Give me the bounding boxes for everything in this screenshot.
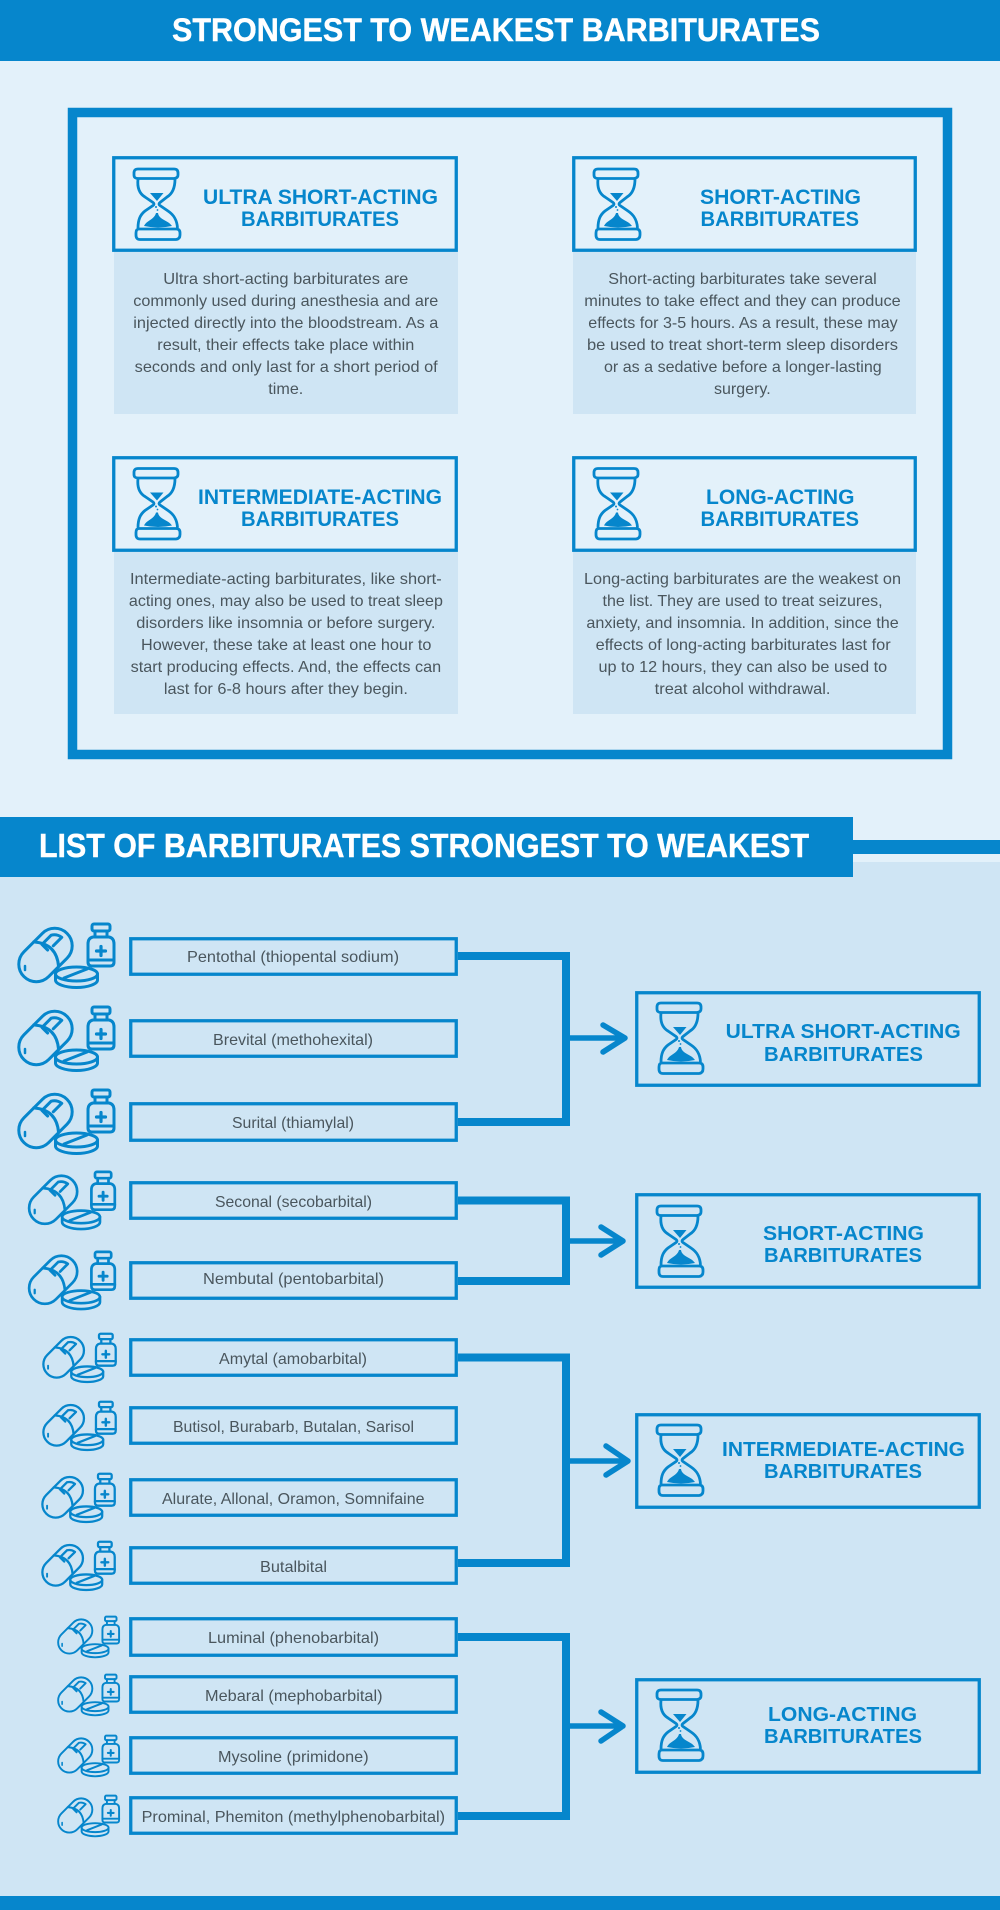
icon: pills <box>38 1332 116 1383</box>
card description: commonly used during anesthesia and are <box>133 293 438 310</box>
card heading: LONG-ACTING <box>706 486 854 509</box>
class box: SHORT-ACTING <box>763 1223 924 1245</box>
icon: pills <box>12 1087 114 1155</box>
panel: short-acting card <box>573 158 916 414</box>
drug label: Butisol, Burabarb, Butalan, Sarisol <box>173 1419 414 1436</box>
drug label <box>131 1183 456 1218</box>
icon: hourglass <box>657 1690 703 1760</box>
card description: start producing effects. And, the effects can <box>131 659 441 676</box>
panel: ultra short-acting card <box>114 158 458 414</box>
icon: hourglass <box>134 169 180 240</box>
group: intermediate-acting drugs <box>37 1332 979 1591</box>
card description: treat alcohol withdrawal. <box>655 681 830 698</box>
drug label: Alurate, Allonal, Oramon, Somnifaine <box>162 1491 425 1508</box>
card description <box>584 271 901 398</box>
card description: acting ones, may also be used to treat sleep <box>129 593 443 610</box>
class box: ULTRA SHORT-ACTING <box>726 1021 961 1043</box>
drug label: Mysoline (primidone) <box>218 1749 369 1766</box>
card header box <box>114 158 456 250</box>
drug label <box>131 1677 456 1712</box>
drug label: Brevital (methohexital) <box>213 1032 373 1049</box>
icon: hourglass <box>594 468 640 539</box>
icon: hourglass <box>657 1425 703 1496</box>
card heading <box>700 186 861 231</box>
card heading: SHORT-ACTING <box>700 186 861 209</box>
card description: anxiety, and insomnia. In addition, since the <box>586 615 899 632</box>
class box: BARBITURATES <box>764 1245 922 1267</box>
drug label: Nembutal (pentobarbital) <box>203 1271 384 1288</box>
panel: long-acting card <box>573 458 916 714</box>
drug label <box>131 1408 456 1443</box>
card description: Short-acting barbiturates take several <box>608 271 877 288</box>
icon: pills <box>12 1004 114 1072</box>
class box: LONG-ACTING <box>768 1704 917 1726</box>
card heading <box>203 186 438 231</box>
card header box <box>574 458 915 550</box>
section heading: LIST OF BARBITURATES STRONGEST TO WEAKEST <box>39 827 809 864</box>
card description <box>584 571 901 698</box>
card description: last for 6-8 hours after they begin. <box>164 681 408 698</box>
class box <box>637 1415 979 1507</box>
drug label <box>131 1340 456 1375</box>
class box: INTERMEDIATE-ACTING <box>722 1439 965 1461</box>
arrow <box>568 1446 628 1475</box>
section heading banner <box>0 817 1000 877</box>
group: ultra short-acting drugs <box>12 921 979 1155</box>
icon: hourglass <box>134 468 180 539</box>
icon: hourglass <box>594 169 640 240</box>
class box: BARBITURATES <box>764 1461 922 1483</box>
group: long-acting drugs <box>54 1615 979 1837</box>
icon: pills <box>37 1540 115 1591</box>
card body background <box>573 252 916 414</box>
drug label: Luminal (phenobarbital) <box>208 1630 379 1647</box>
card description: result, their effects take place within <box>157 337 414 354</box>
drug label <box>131 1798 456 1833</box>
class box: BARBITURATES <box>764 1044 923 1066</box>
icon: pills <box>54 1673 119 1716</box>
icon: pills <box>37 1472 115 1523</box>
class box <box>637 1680 979 1772</box>
card description: However, these take at least one hour to <box>141 637 431 654</box>
arrow <box>568 1025 625 1052</box>
card description: time. <box>268 381 303 398</box>
drug label <box>131 1548 456 1583</box>
drug label <box>131 939 456 974</box>
title banner <box>0 0 1000 61</box>
drug label <box>131 1104 456 1140</box>
card description: effects of long-acting barbiturates last for <box>596 637 891 654</box>
drug label: Mebaral (mephobarbital) <box>205 1688 382 1705</box>
card heading: BARBITURATES <box>700 208 859 231</box>
card body background <box>114 252 458 414</box>
connector bracket <box>458 956 566 1122</box>
card body background <box>573 552 916 714</box>
class box <box>637 1195 979 1287</box>
icon: pills <box>54 1615 119 1658</box>
panel: list section background <box>0 862 1000 1896</box>
group: short-acting drugs <box>23 1169 979 1310</box>
icon: pills <box>12 921 114 989</box>
card description: up to 12 hours, they can also be used to <box>598 659 887 676</box>
icon: pills <box>54 1794 119 1837</box>
drug label: Seconal (secobarbital) <box>215 1194 372 1211</box>
drug label: Surital (thiamylal) <box>232 1115 354 1132</box>
panel: intermediate-acting card <box>114 458 458 714</box>
card heading: BARBITURATES <box>241 508 399 531</box>
card description: be used to treat short-term sleep disorders <box>587 337 898 354</box>
card heading: INTERMEDIATE-ACTING <box>198 486 442 509</box>
connector bracket <box>458 1200 566 1281</box>
footer bar <box>0 1896 1000 1910</box>
icon: pills <box>54 1734 119 1777</box>
drug label: Amytal (amobarbital) <box>219 1351 367 1368</box>
drug label <box>131 1021 456 1056</box>
card heading: ULTRA SHORT-ACTING <box>203 186 438 209</box>
card heading <box>198 486 442 531</box>
card header box <box>574 158 915 250</box>
drug label <box>131 1619 456 1655</box>
card header box <box>114 458 456 550</box>
panel: barbiturate classes frame <box>72 112 948 754</box>
icon: hourglass <box>657 1003 703 1074</box>
icon: pills <box>23 1249 115 1310</box>
connector bracket <box>458 1358 566 1563</box>
card description: Intermediate-acting barbiturates, like short- <box>130 571 442 588</box>
drug label: Butalbital <box>260 1559 327 1576</box>
card heading: BARBITURATES <box>241 208 399 231</box>
card description <box>133 271 438 398</box>
card description: Ultra short-acting barbiturates are <box>163 271 408 288</box>
drug label <box>131 1480 456 1515</box>
card description: injected directly into the bloodstream. As a <box>133 315 438 332</box>
card description: minutes to take effect and they can produce <box>584 293 901 310</box>
drug label: Prominal, Phemiton (methylphenobarbital) <box>142 1809 445 1826</box>
class box: BARBITURATES <box>764 1726 922 1748</box>
card description: the list. They are used to treat seizures, <box>602 593 883 610</box>
drug label <box>131 1738 456 1773</box>
card description: seconds and only last for a short period of <box>135 359 438 376</box>
arrow <box>568 1227 623 1255</box>
card body background <box>114 552 458 714</box>
card description: or as a sedative before a longer-lasting <box>604 359 882 376</box>
drug label: Pentothal (thiopental sodium) <box>187 949 399 966</box>
icon: pills <box>23 1169 115 1230</box>
card description <box>129 571 443 698</box>
card description: disorders like insomnia or before surgery. <box>136 615 435 632</box>
class box <box>637 993 979 1085</box>
card description: surgery. <box>714 381 771 398</box>
arrow <box>568 1712 623 1741</box>
card description: effects for 3-5 hours. As a result, these may <box>588 315 898 332</box>
card description: Long-acting barbiturates are the weakest on <box>584 571 901 588</box>
card heading <box>700 486 859 531</box>
drug label <box>131 1263 456 1298</box>
card heading: BARBITURATES <box>700 508 859 531</box>
icon: hourglass <box>657 1206 703 1276</box>
icon: pills <box>38 1400 116 1451</box>
title: STRONGEST TO WEAKEST BARBITURATES <box>172 12 820 48</box>
connector bracket <box>458 1637 566 1816</box>
